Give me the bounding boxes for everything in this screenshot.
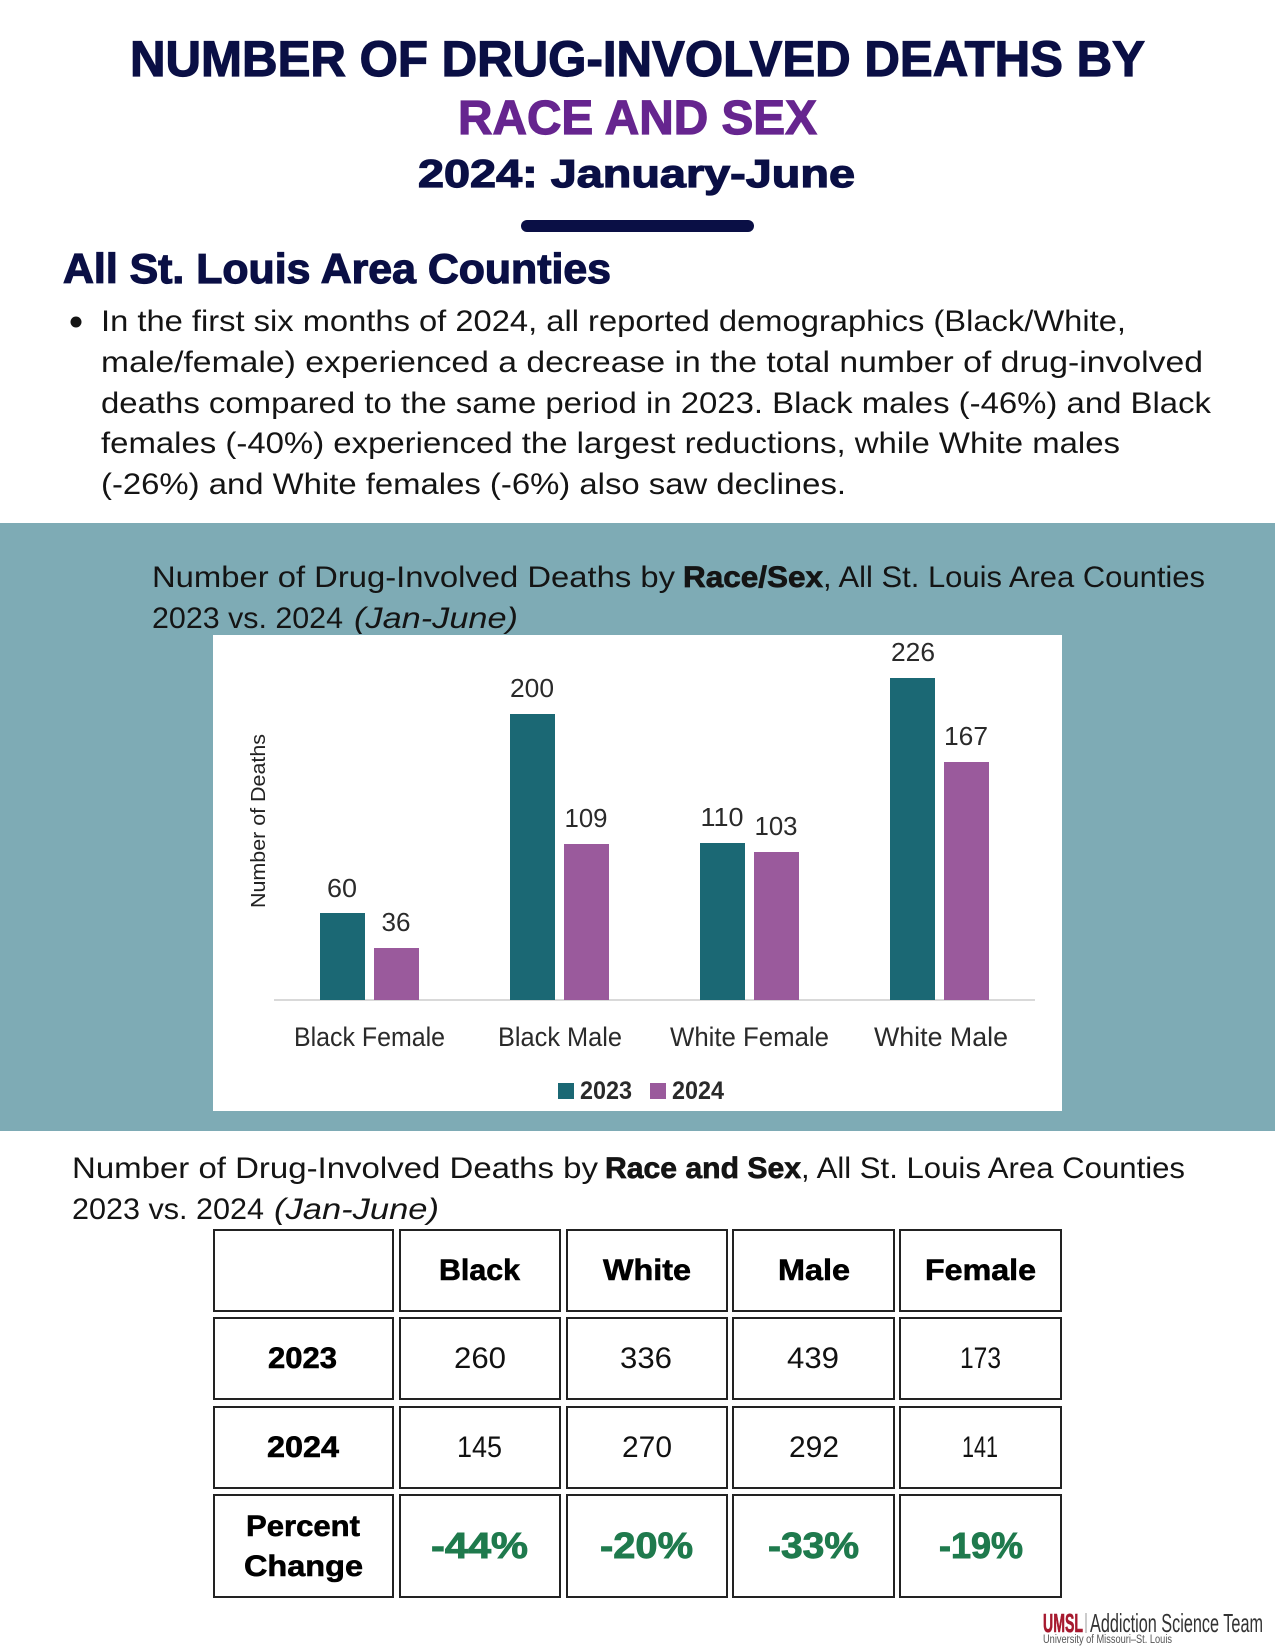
bars: Black Female: 36 (382, 907, 410, 937)
chart heading: 2023 vs. 2024 (152, 602, 343, 635)
table row: 2023: 2023 (268, 1342, 337, 1375)
table row: percent change (214, 1495, 1061, 1597)
table heading: (Jan-June) (274, 1193, 439, 1226)
data table (214, 1230, 1061, 1597)
table row: 2023 (214, 1318, 1061, 1399)
table row: percent change: Change (244, 1550, 363, 1583)
bars: Black Male (510, 673, 609, 1000)
chart heading: Race/Sex (683, 561, 824, 594)
category labels: White Male (874, 1022, 1008, 1052)
panel: chart background (0, 523, 1275, 1131)
table row: header: Female (925, 1254, 1036, 1287)
bars: White Male: 226 (891, 637, 935, 667)
bars: White Male (890, 637, 989, 1000)
category labels: White Female (670, 1022, 829, 1052)
summary bullet text: females (-40%) experienced the largest reductions, while White males (101, 427, 1120, 460)
summary bullet text: deaths compared to the same period in 2023. Black males (-46%) and Black (101, 387, 1211, 420)
chart heading: , All St. Louis Area Counties (823, 561, 1205, 594)
bars: Black Male: 200 (510, 673, 554, 703)
table row: percent change: -19% (939, 1525, 1023, 1566)
table row: percent change: -33% (768, 1525, 859, 1566)
table heading: Race and Sex (605, 1152, 802, 1185)
table heading (72, 1152, 1185, 1226)
bars: Black Female (320, 873, 419, 1000)
table row: percent change: -44% (431, 1525, 528, 1566)
table row: 2024: 145 (457, 1431, 502, 1464)
summary bullet text: In the first six months of 2024, all reported demographics (Black/White, (101, 305, 1126, 338)
chart heading: Number of Drug-Involved Deaths by (152, 561, 675, 594)
table row: 2024: 270 (622, 1431, 672, 1464)
chart heading (152, 561, 1205, 635)
table row: header: Black (439, 1254, 520, 1287)
category labels: Black Female (294, 1022, 445, 1052)
bars: Black Male: 109 (564, 803, 608, 833)
bars: White Female: 103 (754, 811, 798, 841)
bars: White Female: 110 (700, 802, 744, 832)
logo: UMSL Addiction Science Team: University of Missouri–St. Louis (1043, 1634, 1172, 1646)
bars: White Male: 167 (944, 721, 988, 751)
category labels (294, 1022, 1008, 1052)
legend: 2024 (672, 1077, 724, 1105)
table row: 2024: 2024 (267, 1431, 339, 1464)
table row: percent change: -20% (600, 1525, 693, 1566)
table row: header (214, 1230, 1061, 1311)
table row: 2023: 439 (787, 1342, 839, 1375)
bars: Black Female: 60 (327, 873, 357, 903)
table row: 2023: 173 (960, 1342, 1001, 1375)
table row: 2024: 141 (962, 1431, 998, 1464)
bar chart (213, 635, 1062, 1111)
table row: 2023: 260 (454, 1342, 506, 1375)
table row: 2023: 336 (620, 1342, 672, 1375)
table heading: Number of Drug-Involved Deaths by (72, 1152, 598, 1185)
table heading: 2023 vs. 2024 (72, 1193, 264, 1226)
legend (558, 1077, 724, 1105)
category labels: Black Male (498, 1022, 622, 1052)
table row: percent change: Percent (246, 1510, 360, 1543)
title (130, 31, 1145, 196)
heading: all counties: All St. Louis Area Counties (63, 245, 611, 292)
summary bullet text: male/female) experienced a decrease in the total number of drug-involved (101, 346, 1203, 379)
title: RACE AND SEX (458, 92, 817, 145)
table row: 2024 (214, 1407, 1061, 1488)
y axis title: Number of Deaths (248, 734, 270, 908)
table row: header: White (603, 1254, 691, 1287)
logo: UMSL Addiction Science Team: UMSL (1043, 1608, 1083, 1638)
table row: 2024: 292 (789, 1431, 839, 1464)
summary bullet text (70, 305, 1211, 501)
table heading: , All St. Louis Area Counties (801, 1152, 1185, 1185)
title underline bar (521, 220, 754, 232)
legend: 2023 (580, 1077, 632, 1105)
title: NUMBER OF DRUG-INVOLVED DEATHS BY (130, 31, 1145, 87)
logo: UMSL Addiction Science Team (1043, 1608, 1263, 1646)
table row: header: Male (778, 1254, 850, 1287)
bars: White Female (700, 802, 799, 1000)
chart heading: (Jan-June) (354, 602, 518, 635)
summary bullet text: (-26%) and White females (-6%) also saw declines. (101, 468, 846, 501)
title: 2024: January-June (418, 153, 855, 196)
